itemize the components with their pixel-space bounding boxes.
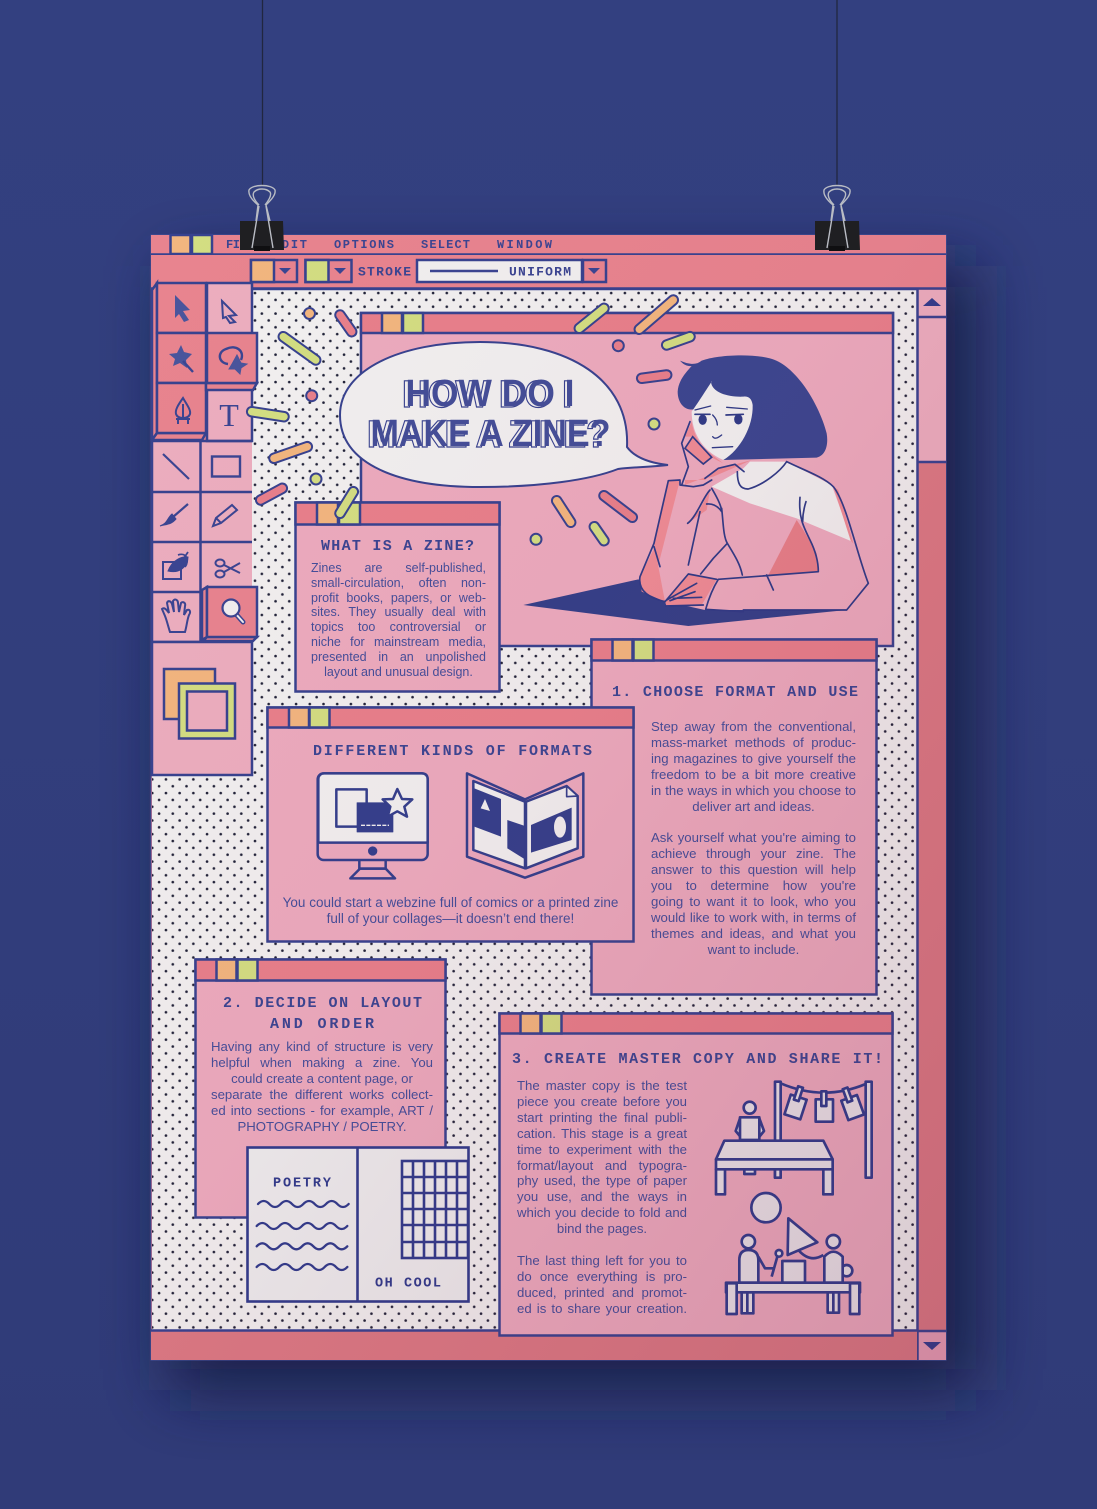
- icon: brush: [160, 504, 188, 526]
- icon: rectangle tool: [212, 456, 240, 476]
- text block: profit books, papers, or web-: [311, 591, 486, 605]
- heading: 3. CREATE MASTER COPY AND SHARE IT!: [512, 1051, 883, 1068]
- icon: direct selection arrow: [222, 301, 236, 323]
- text block: answer to this question will help: [651, 862, 856, 877]
- icon: print table and drying line: [716, 1082, 872, 1194]
- illustration: open booklet: OH COOL: [375, 1276, 441, 1292]
- text block: Ask yourself what you're aiming to: [651, 830, 856, 845]
- text block: topics too controversial or: [311, 620, 486, 634]
- heading: WHAT IS A ZINE?: [321, 538, 474, 555]
- confetti sprinkles: [252, 300, 690, 545]
- options bar: colours and stroke: UNIFORM: [509, 264, 571, 280]
- heading: AND ORDER: [270, 1016, 374, 1033]
- text block: [311, 561, 486, 683]
- text block: Step away from the conventional,: [651, 719, 856, 734]
- icon: type tool: T: [219, 397, 239, 433]
- title: MAKE A ZINE?: [367, 414, 607, 456]
- hanging strings: [262, 0, 837, 186]
- text block: [651, 719, 856, 959]
- menu bar: EDIT: [273, 238, 307, 252]
- menu bar: OPTIONS: [334, 238, 394, 252]
- text block: [211, 1039, 433, 1137]
- options bar: colours and stroke: [151, 255, 946, 289]
- text block: you use, and the ways in: [517, 1189, 687, 1204]
- text block: format/layout and typogra-: [517, 1158, 687, 1173]
- text block: freedom to be a bit more creative: [651, 767, 856, 782]
- icon: magic wand: [169, 345, 193, 372]
- text block: you to determine how you're: [651, 878, 856, 893]
- raised tools: [152, 283, 257, 440]
- text block: phy used, the type of paper: [517, 1173, 687, 1188]
- text block: ing magazines to give yourself the: [651, 751, 856, 766]
- text block: start printing the final publi-: [517, 1110, 687, 1125]
- text block: The master copy is the test: [517, 1078, 687, 1093]
- icon: line tool: [163, 454, 189, 479]
- icon: pen nib: [176, 398, 190, 424]
- menu bar: FI: [226, 238, 240, 252]
- text block: sites. They usually deal with: [311, 605, 486, 619]
- illustration: open booklet: POETRY: [273, 1176, 332, 1192]
- icon: desktop monitor: [318, 773, 428, 878]
- title: HOW DO I: [402, 374, 572, 416]
- text block: ed is to share your creation.: [517, 1301, 687, 1316]
- text block: You could start a webzine full of comics or a printed zine: [283, 895, 618, 910]
- heading: [223, 995, 422, 1033]
- binder clip left: [240, 186, 284, 251]
- icon: lasso: [220, 347, 247, 374]
- text block: deliver art and ideas.: [692, 799, 815, 814]
- panel: hero window: [361, 313, 893, 646]
- icon: printed zine: [467, 773, 583, 878]
- title: MAKE A ZINE?: [370, 413, 610, 455]
- poster: app window frame: [151, 235, 946, 1360]
- text block: could create a content page, or: [231, 1071, 413, 1086]
- menu bar: SELECT: [421, 238, 470, 252]
- text block: achieve through your zine. The: [651, 846, 856, 861]
- text block: presented in an unpolished: [311, 650, 486, 664]
- text block: themes and ideas, and what you: [651, 926, 856, 941]
- poster shadow: [170, 266, 976, 1390]
- icon: selection arrow: [175, 295, 190, 322]
- title: HOW DO I: [406, 373, 574, 415]
- text block: bind the pages.: [557, 1221, 647, 1236]
- heading: 2. DECIDE ON LAYOUT: [223, 995, 422, 1012]
- text block: going to want it to look, who you: [651, 894, 856, 909]
- text block: Having any kind of structure is very: [211, 1039, 433, 1054]
- options bar: colours and stroke: STROKE: [358, 264, 411, 280]
- text block: would like to work with, in terms of: [651, 910, 856, 925]
- text block: cation. This stage is a great: [517, 1126, 687, 1141]
- text block: small-circulation, often non-: [311, 576, 486, 590]
- text block: full of your collages—it doesn’t end there!: [327, 911, 574, 926]
- text block: [517, 1078, 687, 1318]
- icon: shape builder: [163, 552, 188, 579]
- text block: helpful when making a zine. You: [211, 1055, 433, 1070]
- illustration: girl at desk: [523, 355, 868, 626]
- icon: pencil: [213, 505, 237, 526]
- speech bubble: [340, 342, 668, 487]
- text block: ed into sections - for example, ART /: [211, 1103, 433, 1118]
- text block: in the ways in which you choose to: [651, 783, 856, 798]
- panel: different kinds of formats: [265, 708, 636, 942]
- text block: piece you create before you: [517, 1094, 687, 1109]
- panel: create master copy and share: [500, 1014, 892, 1336]
- icon: hand: [162, 600, 190, 632]
- heading: 1. CHOOSE FORMAT AND USE: [612, 684, 858, 701]
- text block: separate the different works collect-: [211, 1087, 433, 1102]
- panel: what is a zine: [296, 502, 500, 692]
- text block: do once everything is pro-: [517, 1269, 687, 1284]
- panel: decide on layout and order: [196, 960, 446, 1218]
- text block: duced, printed and promot-: [517, 1285, 687, 1300]
- bottom bar: [151, 1330, 917, 1360]
- swatch panel: [152, 642, 252, 775]
- text block: mass-market methods of produc-: [651, 735, 856, 750]
- icon: scissors: [216, 560, 240, 578]
- text block: time to experiment with the: [517, 1142, 687, 1157]
- menu bar: WINDOW: [497, 238, 553, 252]
- text block: [265, 895, 636, 929]
- text block: want to include.: [708, 942, 799, 957]
- illustration: open booklet: [248, 1147, 468, 1302]
- text block: which you decide to fold and: [517, 1205, 687, 1220]
- text block: layout and unusual design.: [324, 665, 473, 679]
- heading: DIFFERENT KINDS OF FORMATS: [313, 743, 592, 760]
- menu bar: [151, 235, 946, 255]
- panel: choose format and use: [592, 640, 876, 994]
- text block: niche for mainstream media,: [311, 635, 486, 649]
- wavy text lines: [257, 1201, 349, 1270]
- text block: Zines are self-published,: [311, 561, 486, 575]
- dotted canvas: [152, 289, 917, 1330]
- icon: magnifier (active): [202, 587, 257, 641]
- icon: sharing table: [726, 1193, 860, 1314]
- image grid: [402, 1161, 468, 1258]
- binder clip right: [815, 186, 860, 251]
- text block: The last thing left for you to: [517, 1253, 687, 1268]
- poster lighting: [151, 235, 946, 1360]
- text block: PHOTOGRAPHY / POETRY.: [237, 1119, 407, 1134]
- scrollbar: [917, 289, 946, 1360]
- panel: toolbox: [152, 283, 257, 775]
- title: [367, 373, 610, 456]
